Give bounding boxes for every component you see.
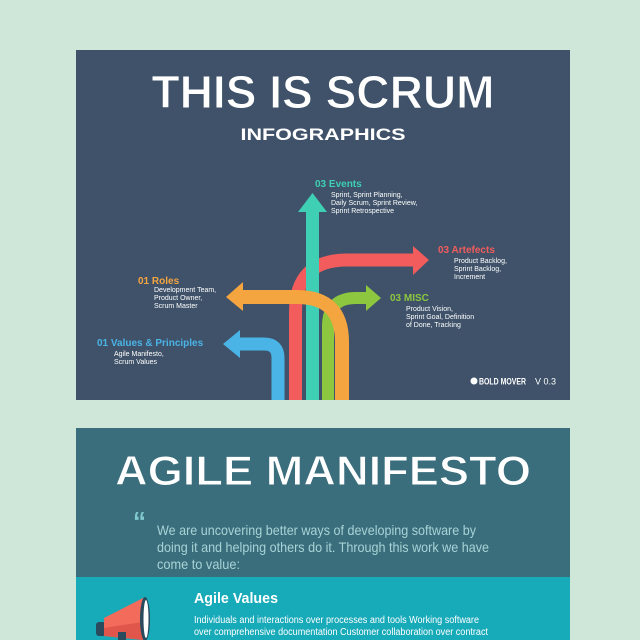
label: values: Agile Manifesto, (114, 351, 164, 358)
label: values (97, 338, 204, 366)
label: events: Daily Scrum, Sprint Review, (331, 200, 417, 207)
label: artefacts: Product Backlog, (454, 258, 507, 265)
logo: BOLD MOVER (479, 376, 526, 386)
arrow: events (298, 193, 327, 400)
icon: quote mark: “ (133, 506, 146, 536)
subtitle: INFOGRAPHICS (240, 125, 406, 144)
label: roles: 01 Roles (138, 276, 180, 287)
label: values: 01 Values & Principles (97, 338, 204, 349)
body text: Individuals and interactions over processes and tools Working software (194, 615, 479, 626)
heading: AGILE MANIFESTO (115, 447, 531, 494)
panel: scrum (76, 50, 570, 400)
label: roles: Scrum Master (154, 303, 198, 310)
label: misc: of Done, Tracking (406, 322, 461, 329)
label: misc: Sprint Goal, Definition (406, 314, 474, 321)
label: values: Scrum Values (114, 359, 158, 366)
label: artefacts (438, 245, 507, 281)
panel: agile manifesto (76, 428, 570, 640)
subheading: agile values: Agile Values (194, 590, 278, 607)
label: misc: 03 MISC (390, 293, 429, 304)
quote text: doing it and helping others do it. Through this work we have (157, 539, 489, 555)
arrow: misc (328, 285, 381, 400)
label: artefacts: Increment (454, 274, 485, 281)
body text: over comprehensive documentation Customer collaboration over contract (194, 627, 488, 638)
icon: megaphone (96, 597, 150, 640)
label: events (315, 179, 417, 215)
label: roles: Development Team, (154, 287, 216, 294)
label: events: 03 Events (315, 179, 362, 190)
arrow: roles (226, 282, 342, 400)
label: artefacts: Sprint Backlog, (454, 266, 501, 273)
quote text: We are uncovering better ways of developing software by (157, 522, 476, 538)
label: roles: Product Owner, (154, 295, 202, 302)
quote text: come to value: (157, 556, 240, 572)
label: misc: Product Vision, (406, 306, 453, 313)
logo: V 0.3 (535, 376, 556, 386)
arrow: values (223, 330, 278, 400)
title: THIS IS SCRUM (152, 66, 494, 118)
label: artefacts: 03 Artefects (438, 245, 495, 256)
label: misc (390, 293, 474, 329)
arrow: artefacts (296, 246, 429, 400)
label: roles (138, 276, 216, 310)
label: events: Sprint Retrospective (331, 208, 394, 215)
label: events: Sprint, Sprint Planning, (331, 192, 403, 199)
